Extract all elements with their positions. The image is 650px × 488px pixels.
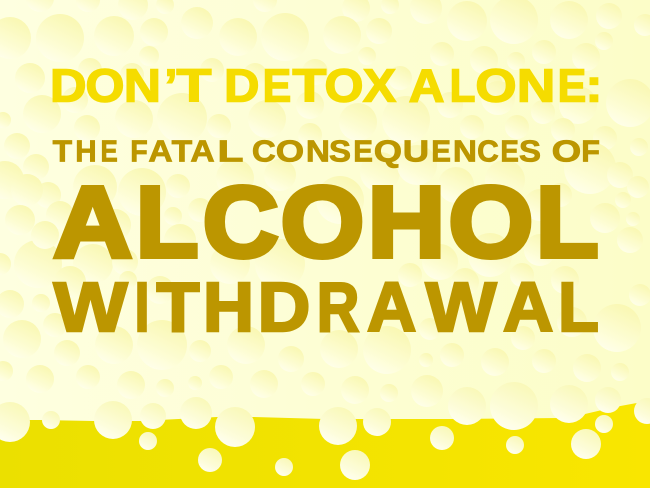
title: don't detox alone: ’ [164,59,177,111]
subtitle: the fatal consequences of: C [252,134,276,169]
title: alcohol: O [281,166,364,278]
yellow liquid band [0,400,650,488]
subtitle: the fatal consequences of: S [329,134,351,169]
subtitle: the fatal consequences of: C [477,134,499,169]
title: don't detox alone: O [325,59,363,111]
title: don't detox alone: L [450,59,475,111]
title: don't detox alone: : [586,59,602,111]
subtitle: the fatal consequences of: O [552,134,581,169]
title: don't detox alone: T [177,59,211,111]
title: withdrawal: R [317,268,359,346]
title: don't detox alone: E [558,59,586,111]
title: don't detox alone: D [224,59,259,111]
title: alcohol: O [449,166,533,278]
title: withdrawal: H [203,268,254,346]
subtitle: the fatal consequences of: A [148,134,173,169]
subtitle: the fatal consequences of: F [130,134,148,169]
title: don't detox alone: O [86,59,124,111]
subtitle: the fatal consequences of: F [581,134,600,169]
title: alcohol: L [536,166,598,278]
foam bubbles [0,382,650,480]
title: withdrawal: A [503,268,553,346]
subtitle: the fatal consequences of: U [403,134,429,169]
title: alcohol: L [136,166,198,278]
subtitle: the fatal consequences of: S [519,134,541,169]
subtitle: the fatal consequences of: N [453,134,477,169]
title: don't detox alone: X [363,59,396,111]
subtitle: the fatal consequences of: N [306,134,330,169]
subtitle: the fatal consequences of: O [276,134,304,169]
title: alcohol: A [54,166,132,278]
subtitle: the fatal consequences of: Q [374,134,402,169]
subtitle: the fatal consequences of: E [431,134,451,169]
title: alcohol: C [203,166,278,278]
title: withdrawal: W [426,268,496,346]
subtitle: the fatal consequences of: A [190,134,215,169]
subtitle: the fatal consequences of: T [53,134,72,169]
title: don't detox alone: T [293,59,326,111]
title: don't detox alone: A [409,59,444,111]
title: don't detox alone: E [263,59,291,111]
title: withdrawal: W [54,268,127,346]
title: don't detox alone: N [124,59,161,111]
subtitle: the fatal consequences of: T [172,134,193,169]
subtitle: the fatal consequences of: L [217,134,243,169]
subtitle: the fatal consequences of: H [75,134,97,169]
title: don't detox alone: N [517,59,555,111]
title: withdrawal: I [135,268,149,346]
subtitle: the fatal consequences of: E [500,134,519,169]
title: don't detox alone: O [475,59,517,111]
title: withdrawal: L [558,268,599,346]
subtitle: the fatal consequences of: E [353,134,373,169]
title: withdrawal: A [367,268,416,346]
title: withdrawal: T [156,268,200,346]
subtitle: the fatal consequences of: E [100,134,118,169]
title: don't detox alone: D [50,59,86,111]
title: withdrawal: D [258,268,310,346]
title: alcohol: H [368,166,445,278]
